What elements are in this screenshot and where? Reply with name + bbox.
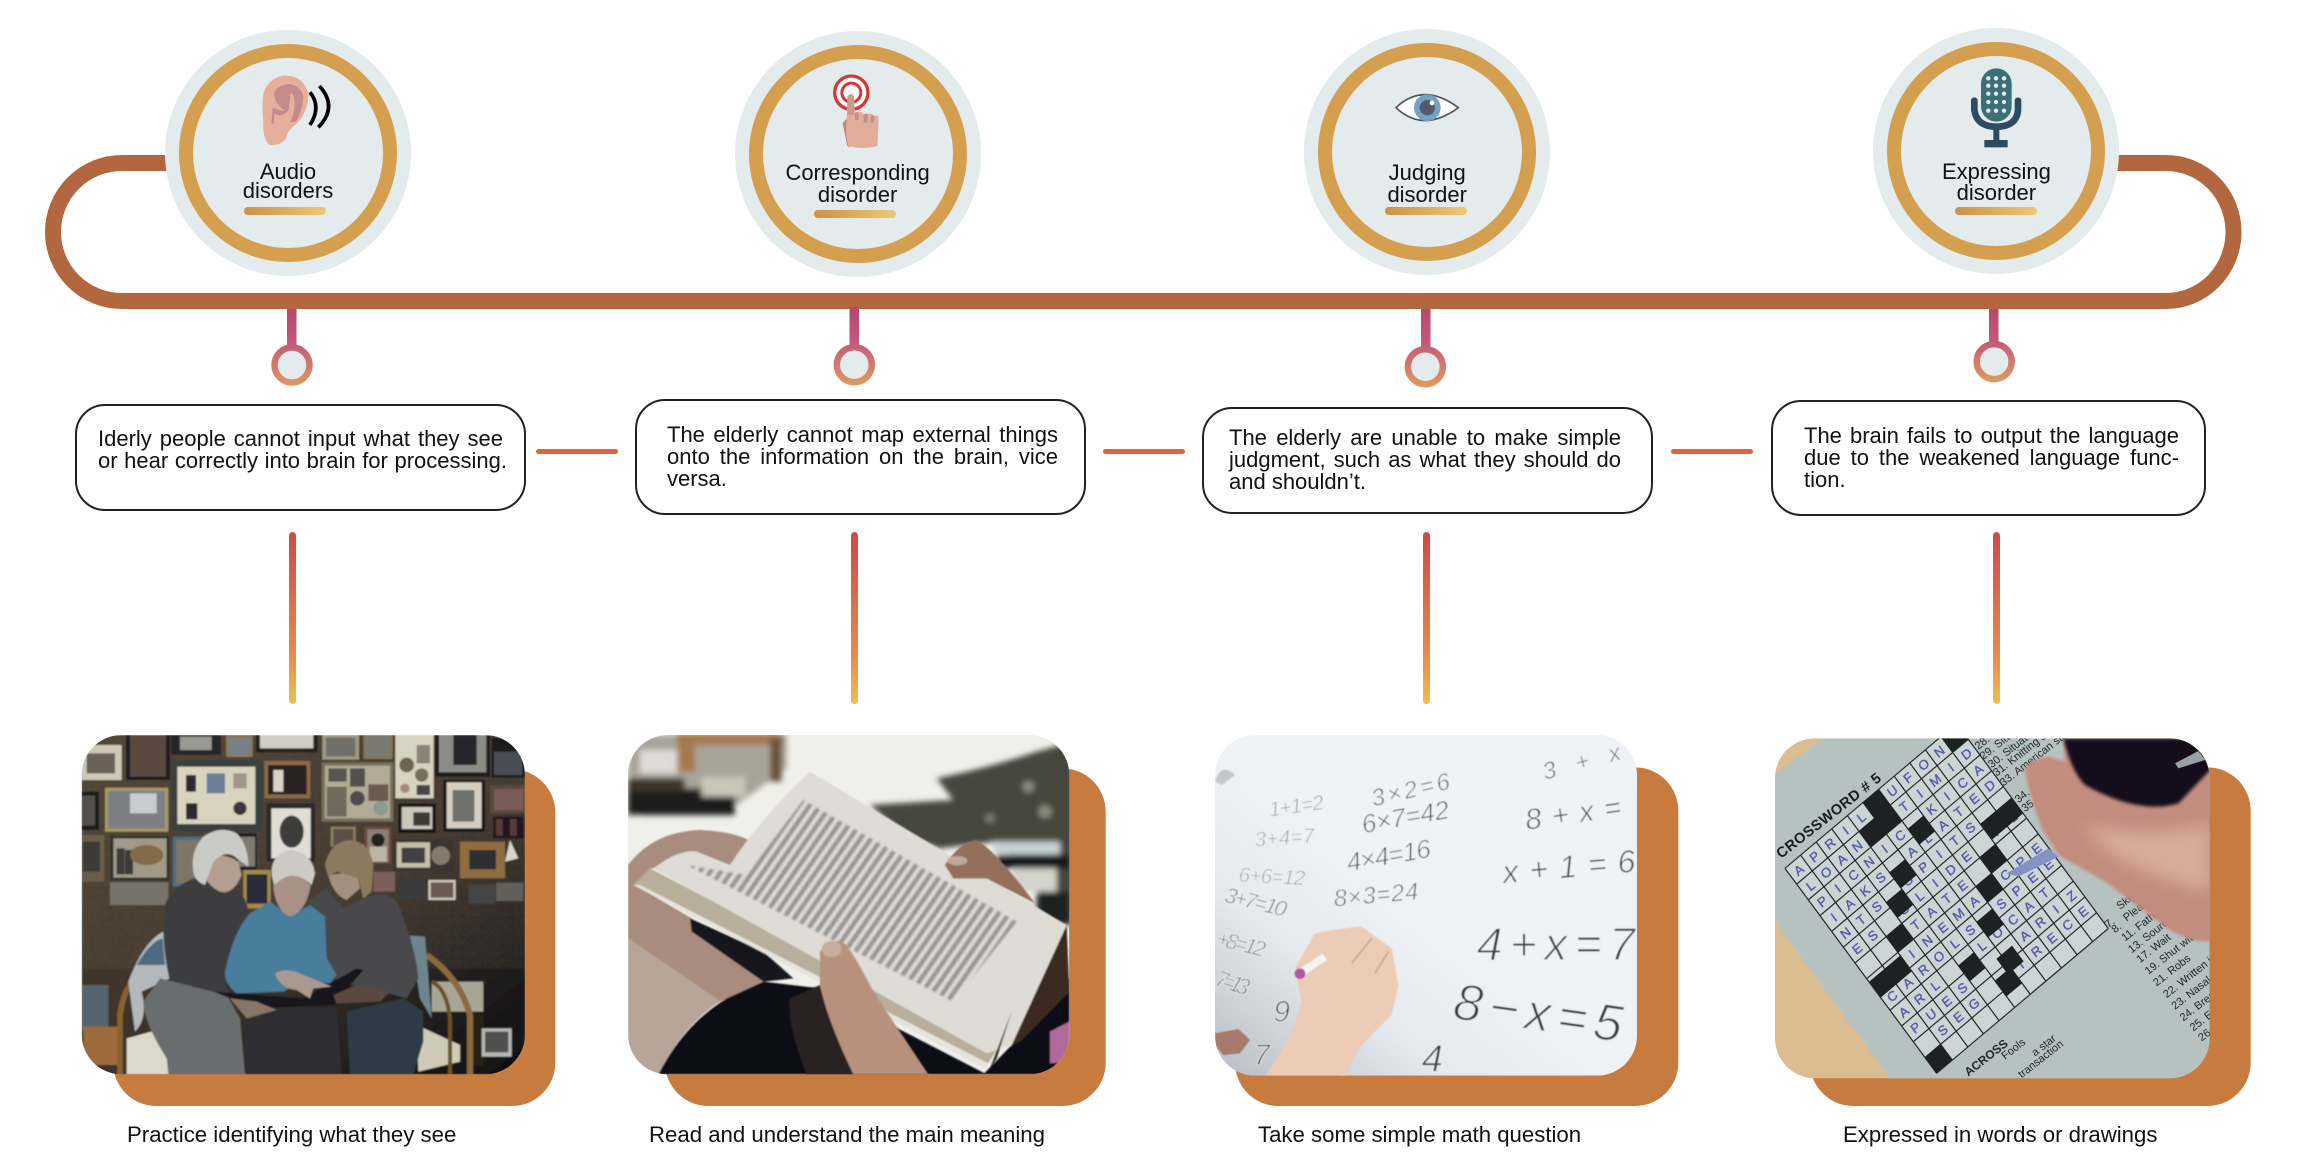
clue text: 11. Fathe	[2119, 906, 2163, 944]
connector 2	[1103, 449, 1185, 454]
title: Audio	[260, 159, 316, 184]
text box 2	[635, 399, 1086, 515]
photo	[628, 733, 1073, 1074]
title: disorder	[1957, 180, 2036, 205]
photo: 7	[1253, 1039, 1271, 1072]
hand holding pen	[2007, 738, 2212, 942]
circle badge: Expressing disorder	[1873, 28, 2119, 274]
puzzle heading: CROSSWORD # 5	[1774, 771, 1885, 862]
clue text: 28. Cop	[1973, 719, 2011, 752]
text box 1: or hear correctly into brain for processing.	[98, 448, 507, 473]
photo card 3: math on whiteboard	[1215, 735, 1678, 1106]
right woman	[307, 840, 423, 1074]
accent bar	[814, 210, 896, 218]
middle woman	[225, 850, 342, 1074]
photo: 4	[1422, 1038, 1443, 1081]
text box 3: judgment, such as what they should do	[1229, 447, 1621, 472]
photo: 3+7=10	[1222, 882, 1290, 922]
orange backing	[113, 769, 555, 1106]
clue text: 30. Situate	[1986, 729, 2035, 771]
clue text: Fools	[1999, 1036, 2028, 1062]
photo: 7=13	[1212, 965, 1253, 1001]
clue text: 8.	[2109, 921, 2124, 936]
text box 4: due to the weakened language func-	[1804, 445, 2179, 470]
clue text: 7.	[2103, 916, 2117, 931]
stem and ring 4	[1973, 309, 2015, 382]
title	[785, 160, 930, 207]
accent bar	[244, 207, 326, 215]
photo: 3+x	[1540, 739, 1625, 786]
clue text: a star	[2029, 1032, 2059, 1059]
clue text: transaction	[2016, 1038, 2066, 1081]
title	[1387, 160, 1467, 207]
clue text: 31. Knitting sti	[1991, 727, 2053, 779]
icon: eye	[1394, 94, 1460, 122]
text box 3: and shouldn’t.	[1229, 469, 1366, 494]
orange backing	[665, 768, 1106, 1106]
left woman	[143, 830, 248, 1074]
photo: 3+4=7	[1254, 824, 1317, 852]
vertical connector 4	[1992, 532, 2000, 704]
clue text: 35.	[2019, 796, 2039, 815]
photo: 4+x=7	[1477, 918, 1637, 970]
photo	[1774, 719, 2221, 1081]
timeline track	[45, 155, 2242, 309]
orange backing	[1235, 767, 1678, 1106]
title: disorder	[818, 182, 897, 207]
accent bar	[1385, 207, 1467, 215]
circle badge: Judging disorder	[1304, 29, 1550, 275]
clue text: 24. Brea	[2178, 988, 2219, 1024]
album and hands	[213, 968, 390, 1018]
photo card 4: crossword puzzle	[1775, 738, 2251, 1106]
caption 2: Read and understand the main meaning	[649, 1122, 1045, 1147]
photo: 8+x=	[1523, 791, 1623, 837]
orange backing	[1810, 767, 2251, 1106]
vertical connector 2	[850, 532, 858, 704]
icon: finger pressing target	[833, 74, 879, 148]
photo: 6+6=12	[1238, 864, 1306, 890]
title: Corresponding	[785, 160, 930, 185]
clue text: ACROSS	[1962, 1036, 2011, 1079]
title: Expressing	[1942, 159, 2051, 184]
photo: +8=12	[1214, 926, 1268, 962]
photo: x+1=6	[1499, 843, 1637, 890]
vertical connector 1	[288, 532, 296, 704]
vertical connector 3	[1422, 532, 1430, 704]
clue text: 13. Sourc	[2126, 917, 2171, 956]
clue text: 22. Written in	[2161, 951, 2219, 1001]
bench and belongings	[82, 932, 512, 1074]
photo: 8−x=5	[1450, 972, 1627, 1053]
title: disorder	[1387, 182, 1467, 207]
clue text: 26	[2196, 1027, 2213, 1044]
photo: 6×7=42	[1359, 794, 1452, 839]
connector 3	[1671, 449, 1753, 454]
text box 2: onto the information on the brain, vice	[667, 444, 1058, 469]
text box 4: tion.	[1804, 467, 1846, 492]
icon: ear with sound waves	[262, 76, 330, 146]
photo card 2: reading a book	[628, 735, 1106, 1106]
photo: 1+1=2	[1267, 791, 1326, 822]
photo: 8×3=24	[1333, 878, 1420, 913]
icon: microphone	[1971, 68, 2022, 148]
photo: 4×4=16	[1344, 833, 1434, 878]
clue text: 34.	[2013, 787, 2032, 806]
clue text: 29. Situate	[1978, 721, 2027, 762]
stem and ring 3	[1404, 309, 1446, 388]
caption 1: Practice identifying what they see	[127, 1122, 456, 1147]
clue text: 21. Robs	[2151, 952, 2194, 989]
clue text: Skij	[2114, 892, 2136, 912]
caption 4: Expressed in words or drawings	[1843, 1122, 2157, 1147]
title: Judging	[1389, 160, 1466, 185]
photo: 3×2=6	[1369, 768, 1453, 813]
crossword grid	[1785, 724, 2108, 1073]
connector 1	[536, 449, 618, 454]
clue text: 17. Wait	[2134, 932, 2173, 966]
photo: 9	[1273, 996, 1290, 1029]
clue text: 19. Shut with	[2143, 929, 2200, 977]
photo	[1212, 735, 1637, 1081]
circle badge: Audio disorders	[165, 30, 411, 276]
clue text: 33. American sta	[1998, 729, 2070, 789]
caption 3: Take some simple math question	[1258, 1122, 1581, 1147]
text box 3: The elderly are unable to make simple	[1229, 425, 1621, 450]
title: disorders	[243, 178, 333, 203]
title	[1942, 159, 2051, 205]
photo	[82, 735, 525, 1074]
text box 4: The brain fails to output the language	[1804, 423, 2179, 448]
title	[243, 159, 333, 203]
text box 1: Iderly people cannot input what they see	[98, 426, 503, 451]
circle badge: Corresponding disorder	[735, 31, 981, 277]
stem and ring 1	[271, 309, 313, 386]
clue text: 25. E	[2188, 1009, 2215, 1034]
text box 1	[75, 404, 526, 511]
text box 2: The elderly cannot map external things	[667, 422, 1058, 447]
text box 3	[1202, 407, 1653, 514]
clue text: Plea	[2121, 900, 2147, 924]
clue text	[1962, 719, 2221, 1081]
text box 2: versa.	[667, 466, 727, 491]
clue text: 23. Nasal c	[2169, 969, 2221, 1012]
photo card 1: family looking at album	[82, 735, 556, 1106]
text box 4	[1771, 400, 2206, 516]
accent bar	[1955, 207, 2037, 215]
stem and ring 2	[834, 307, 876, 386]
